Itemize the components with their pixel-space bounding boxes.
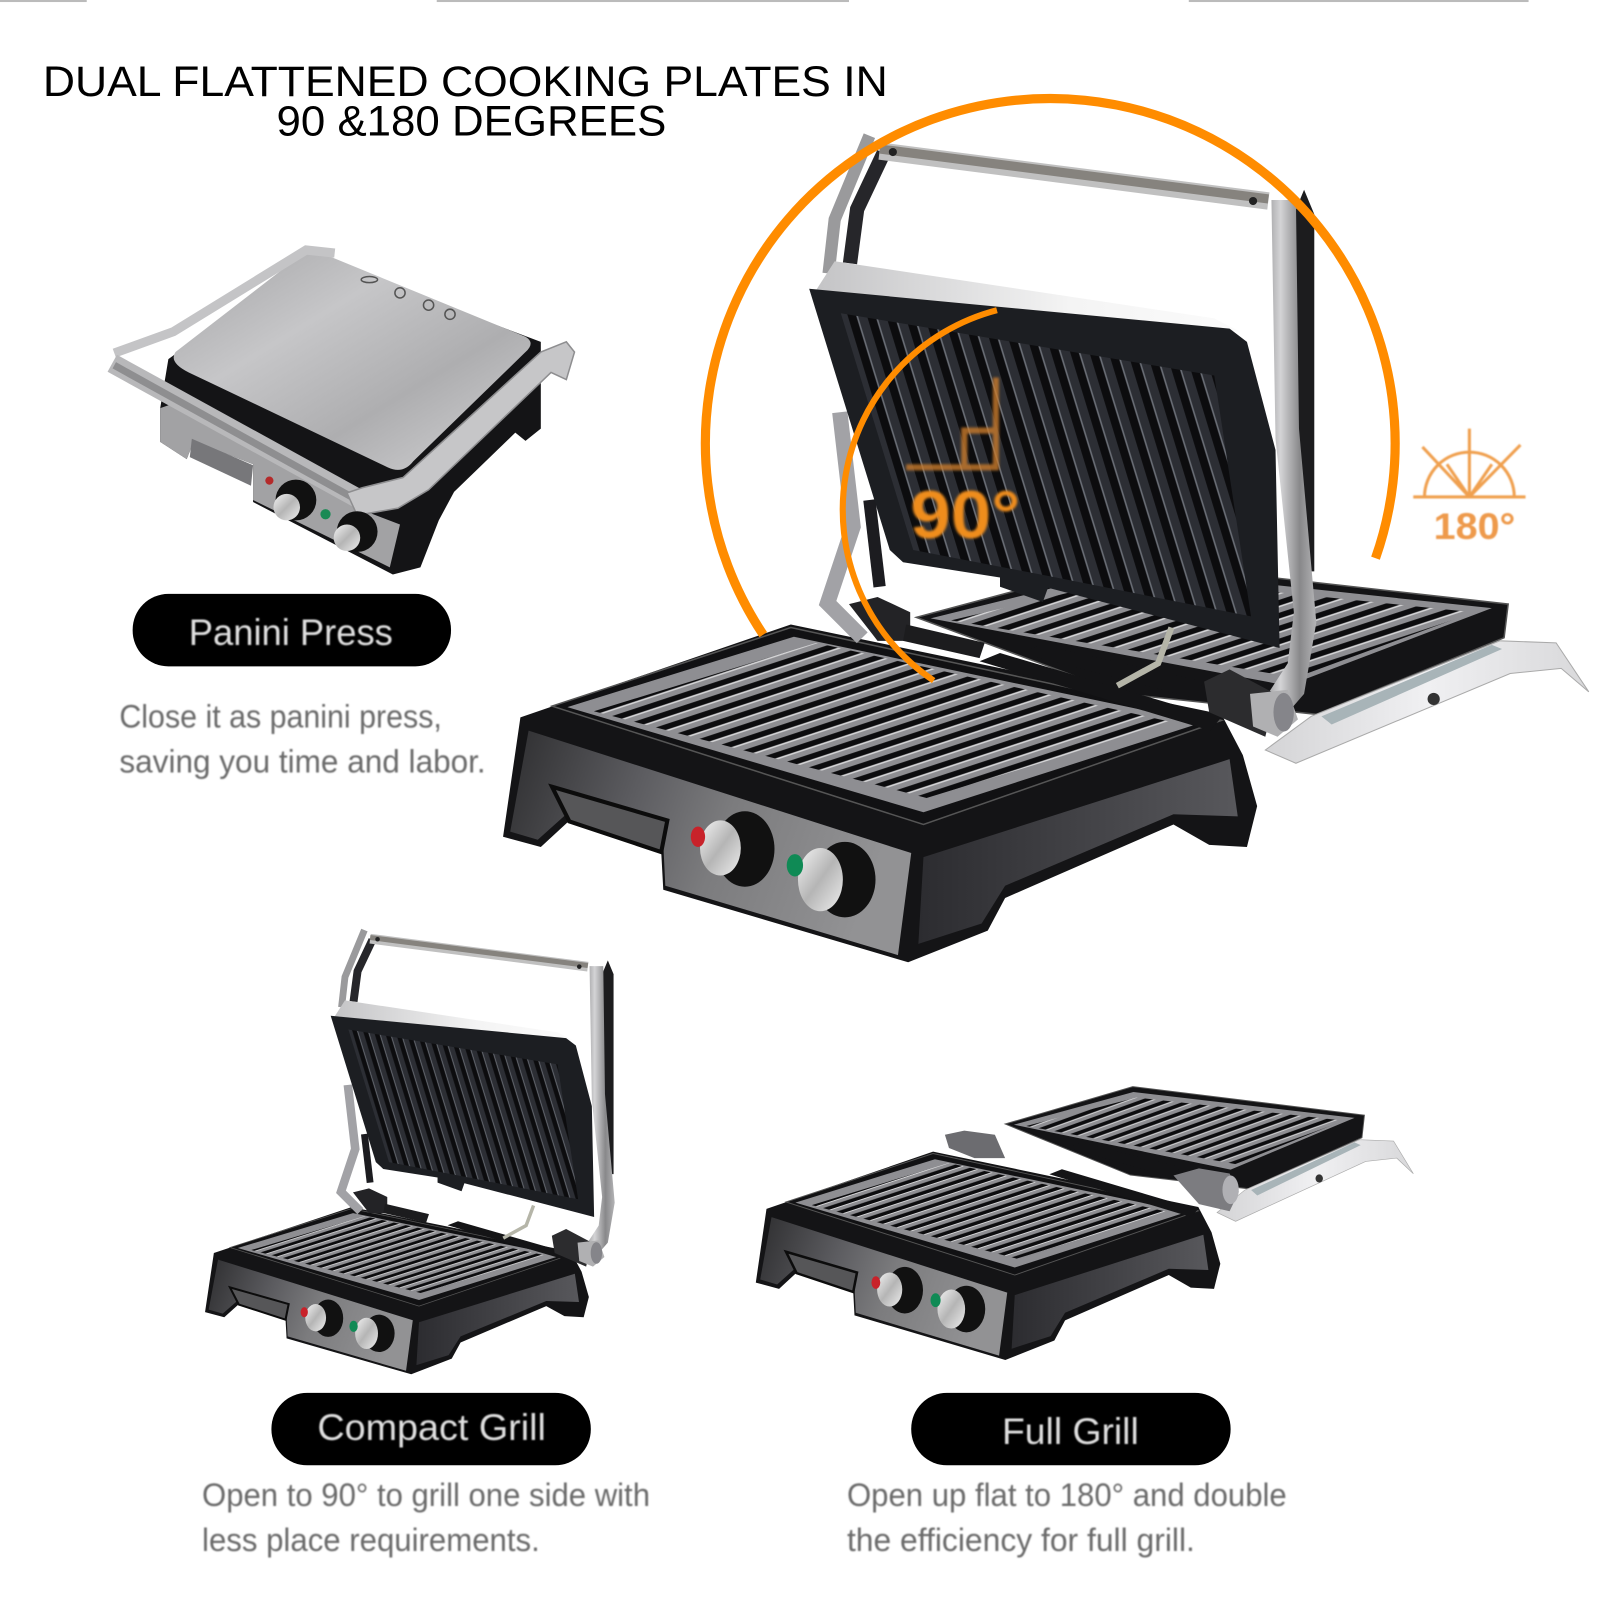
pill: panini press: Panini Press <box>189 612 393 653</box>
panel: main grill open at 90 and 180 degrees <box>503 136 1589 962</box>
panel: compact grill <box>205 930 615 1374</box>
arc: 90 degree orange arc <box>843 310 997 681</box>
pill: compact grill <box>271 1393 591 1465</box>
top edge remnants <box>0 0 1529 2</box>
text: full grill description: the efficiency for full grill. <box>847 1521 1195 1558</box>
title: DUAL FLATTENED COOKING PLATES IN <box>43 58 888 106</box>
icon: 180 degree angle <box>1413 429 1526 547</box>
text: panini press description: Close it as panini press, <box>119 698 442 735</box>
text: compact grill description <box>202 1476 650 1558</box>
pill: compact grill: Compact Grill <box>317 1407 546 1448</box>
pill: full grill <box>911 1393 1231 1465</box>
panel: full grill <box>756 1087 1413 1360</box>
arc: 180 degree orange arc <box>705 99 1395 635</box>
text: panini press description: saving you time and labor. <box>119 742 486 779</box>
title <box>43 58 888 146</box>
text: compact grill description: less place requirements. <box>202 1521 540 1558</box>
text: full grill description: Open up flat to 180° and double <box>847 1476 1287 1513</box>
icon: 90 degree angle: 90° <box>910 478 1020 553</box>
pill: panini press <box>133 594 451 666</box>
pill: full grill: Full Grill <box>1002 1411 1139 1452</box>
text: compact grill description: Open to 90° to grill one side with <box>202 1476 650 1513</box>
panel: panini press closed grill <box>112 250 574 574</box>
icon: 180 degree angle: 180° <box>1434 506 1515 547</box>
icon: 90 degree angle <box>906 378 1020 553</box>
text: panini press description <box>119 698 486 779</box>
text: full grill description <box>847 1476 1287 1558</box>
title: 90 &180 DEGREES <box>277 98 666 146</box>
